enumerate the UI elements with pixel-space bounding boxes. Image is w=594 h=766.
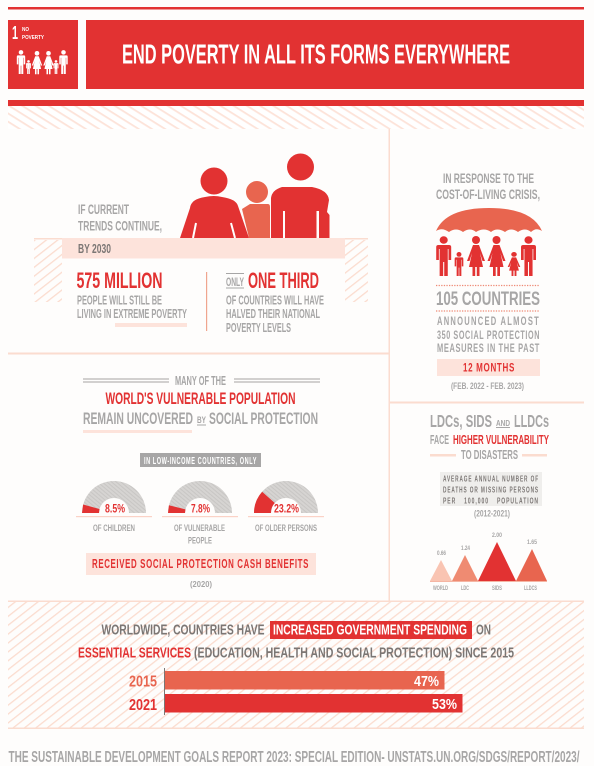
gauge: older persons 23.2% xyxy=(248,481,324,534)
gauge: older persons 23.2%: OF OLDER PERSONS xyxy=(255,523,317,534)
text: if current trends continue: TRENDS CONTINUE, xyxy=(78,218,162,234)
text: year 2020: (2020) xyxy=(190,579,212,589)
stat: 105 countries: 105 COUNTRIES xyxy=(436,288,540,310)
goal icon: no poverty: 1 xyxy=(12,23,18,43)
heading: vulnerable population xyxy=(83,374,320,433)
panel: social protection response xyxy=(436,171,542,391)
panel: government spending xyxy=(8,600,584,729)
band: received cash benefits: RECEIVED SOCIAL PROTECTION CASH BENEFITS xyxy=(92,557,309,571)
icon: umbrella xyxy=(436,208,542,232)
stat: only one third: ONLY xyxy=(226,277,244,289)
gauge: children 8.5% xyxy=(76,481,152,534)
text: period 2012-2021: (2012-2021) xyxy=(474,508,510,518)
gauge: children 8.5%: 8.5% xyxy=(105,504,125,516)
chart: triangles: 1.65 xyxy=(527,540,538,546)
heading: higher vulnerability: FACE xyxy=(430,433,449,447)
heading: higher vulnerability: TO DISASTERS xyxy=(461,448,518,462)
tag: low-income countries: IN LOW-INCOME COUNTRIES, ONLY xyxy=(144,456,257,467)
text: if current trends continue: IF CURRENT xyxy=(78,202,129,217)
box: average annual deaths xyxy=(440,472,542,506)
gauge: children 8.5%: OF CHILDREN xyxy=(93,523,135,534)
text: if current trends continue xyxy=(78,202,162,234)
heading: higher vulnerability: AND xyxy=(496,419,510,428)
goal icon: no poverty: POVERTY xyxy=(22,35,44,41)
heading: higher vulnerability xyxy=(430,411,549,462)
hatch: side decoration xyxy=(34,240,368,302)
chart: triangles: WORLD xyxy=(433,586,448,592)
band: received cash benefits xyxy=(86,553,316,575)
chart: triangles: 1.24 xyxy=(461,546,471,552)
goal icon: no poverty: NO xyxy=(22,27,30,33)
chart: triangles: SIDS xyxy=(492,586,502,592)
chart: triangles: 0.66 xyxy=(437,551,447,557)
bar chart: spending: 47% xyxy=(414,673,439,690)
tag: low-income countries xyxy=(140,453,261,467)
panel: disasters xyxy=(430,411,549,592)
heading: increased spending: INCREASED GOVERNMENT SPENDING xyxy=(273,622,467,638)
gauge: vulnerable people 7.8%: 7.8% xyxy=(191,504,210,516)
goal icon: no poverty xyxy=(8,20,78,89)
chart: triangles: 2.00 xyxy=(492,533,503,539)
icon: family under umbrella xyxy=(436,236,536,276)
gauge: vulnerable people 7.8%: OF VULNERABLE xyxy=(174,523,225,534)
bar chart: spending xyxy=(129,668,462,715)
gauge: older persons 23.2%: 23.2% xyxy=(274,504,299,516)
heading: higher vulnerability: LLDCs xyxy=(514,411,549,431)
heading: vulnerable population: WORLD'S VULNERABLE POPULATION xyxy=(106,389,296,408)
bar chart: spending: 53% xyxy=(432,696,457,713)
text: date range: (FEB. 2022 - FEB. 2023) xyxy=(451,381,524,391)
stat: 575 million xyxy=(76,268,187,327)
bar chart: spending: 2021 xyxy=(129,697,157,714)
chart: triangles: LDC xyxy=(461,586,469,592)
stat: only one third: OF COUNTRIES WILL HAVE xyxy=(226,292,324,308)
heading: higher vulnerability: LDCs, SIDS xyxy=(430,411,492,431)
stat: 575 million: 575 MILLION xyxy=(76,268,162,293)
panel: vulnerable population xyxy=(76,374,324,589)
title banner xyxy=(86,20,584,89)
stat: only one third: HALVED THEIR NATIONAL xyxy=(226,306,320,321)
gauge: vulnerable people 7.8% xyxy=(162,481,238,546)
heading: vulnerable population: BY xyxy=(197,415,206,426)
stat: only one third: ONE THIRD xyxy=(248,268,319,293)
band: by 2030: BY 2030 xyxy=(78,241,111,256)
heading: vulnerable population: MANY OF THE xyxy=(175,374,226,388)
band: 12 months: 12 MONTHS xyxy=(463,360,515,374)
bar chart: spending: 2015 xyxy=(129,674,157,690)
chart: triangles: LLDCS xyxy=(524,586,537,592)
heading: increased spending: ESSENTIAL SERVICES xyxy=(78,644,191,662)
box: average annual deaths: PER 100,000 POPULATION xyxy=(443,496,539,506)
heading: increased spending: WORLDWIDE, COUNTRIES HAVE xyxy=(102,622,264,638)
text: in response: COST-OF-LIVING CRISIS, xyxy=(436,187,540,202)
text: in response: IN RESPONSE TO THE xyxy=(443,171,534,186)
heading: increased spending xyxy=(78,621,514,662)
heading: vulnerable population: SOCIAL PROTECTION xyxy=(209,409,318,428)
text: in response xyxy=(436,171,540,202)
icon: family silhouettes xyxy=(180,154,330,238)
gauge: vulnerable people 7.8%: PEOPLE xyxy=(188,536,212,546)
stat: 575 million: PEOPLE WILL STILL BE xyxy=(77,292,162,308)
stat: 575 million: LIVING IN EXTREME POVERTY xyxy=(77,306,187,321)
band: 12 months xyxy=(437,359,540,376)
heading: increased spending: ON xyxy=(476,622,491,638)
icon: white family xyxy=(17,50,68,74)
chart: triangles xyxy=(430,533,547,592)
stat: only one third: POVERTY LEVELS xyxy=(226,320,291,335)
stat: only one third xyxy=(226,268,324,335)
panel: poverty by 2030 xyxy=(34,154,368,335)
band: by 2030 xyxy=(34,238,368,258)
heading: vulnerable population: REMAIN UNCOVERED xyxy=(83,409,193,428)
text: announced almost 350 measures xyxy=(437,314,540,355)
